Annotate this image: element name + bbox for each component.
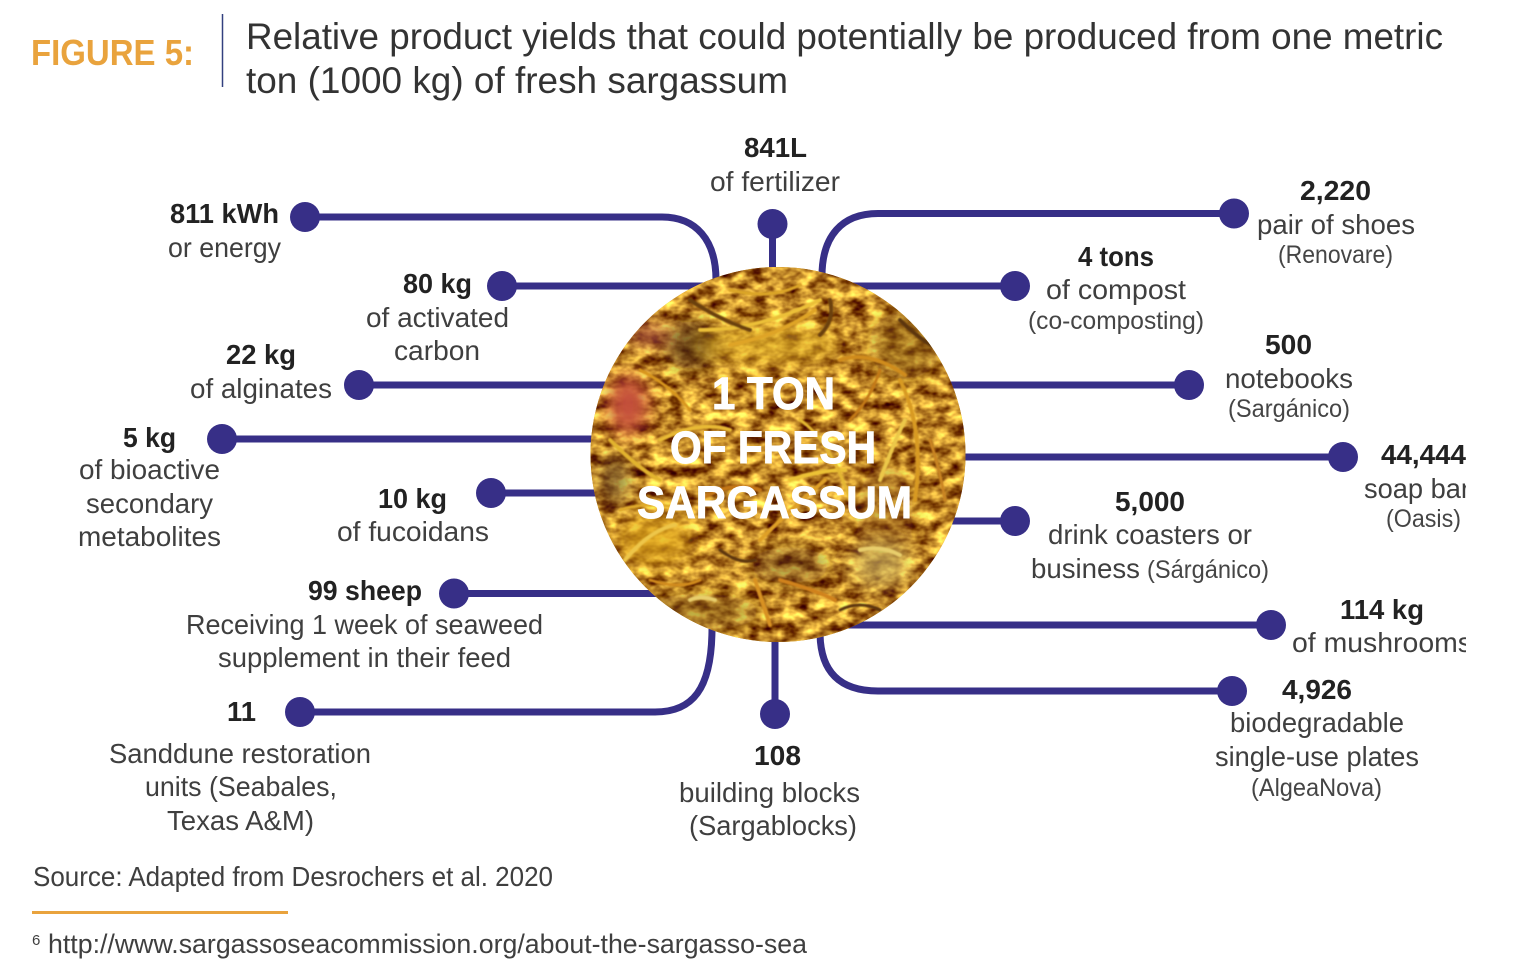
callout: 5,000 drink coasters or business: (Sárgánico) bbox=[1147, 556, 1269, 584]
value: 114 kg bbox=[1340, 594, 1424, 625]
value: 10 kg bbox=[378, 483, 447, 514]
connector bbox=[359, 382, 615, 388]
connector bbox=[845, 282, 1015, 290]
source note: Source: Adapted from Desrochers et al. 2020 bbox=[33, 861, 553, 892]
connector bbox=[222, 436, 600, 442]
connector bbox=[769, 224, 776, 272]
marker bbox=[760, 699, 790, 729]
marker bbox=[1174, 370, 1204, 400]
marker bbox=[290, 202, 320, 232]
value: 99 sheep bbox=[308, 575, 422, 606]
value: 11 bbox=[227, 696, 256, 727]
connector bbox=[772, 636, 778, 714]
connector bbox=[300, 628, 712, 712]
callout: 2,220 pair of shoes: (Renovare) bbox=[1278, 241, 1393, 269]
centre label bbox=[637, 368, 912, 528]
callout: 108 building blocks: (Sargablocks) bbox=[689, 810, 857, 841]
connector bbox=[945, 518, 1015, 524]
marker bbox=[1217, 676, 1247, 706]
description: of mushrooms bbox=[1292, 627, 1472, 658]
marker bbox=[476, 478, 506, 508]
connector bbox=[305, 217, 716, 280]
callout: 108 building blocks bbox=[679, 636, 860, 841]
value: 2,220 bbox=[1300, 175, 1371, 206]
callout: 5 kg of bioactive secondary metabolites: metabolites bbox=[78, 521, 221, 552]
callout: 4,926 biodegradable plates: single-use plates bbox=[1215, 741, 1419, 772]
callout: 841L of fertilizer bbox=[710, 132, 840, 272]
footnote: http://www.sargassoseacommission.org/about-the-sargasso-sea bbox=[48, 929, 808, 959]
description: notebooks bbox=[1225, 363, 1353, 394]
description: pair of shoes bbox=[1257, 209, 1415, 240]
callout: 22 kg of alginates bbox=[190, 339, 615, 404]
figure label: FIGURE 5: bbox=[31, 32, 194, 73]
callout: 5 kg of bioactive secondary metabolites: secondary bbox=[86, 488, 213, 519]
marker bbox=[1000, 271, 1030, 301]
description: biodegradable bbox=[1230, 707, 1404, 738]
centre circle: sargassum photo with label bbox=[590, 267, 966, 643]
callout: 5,000 drink coasters or business bbox=[945, 486, 1269, 584]
description: Receiving 1 week of seaweed bbox=[186, 609, 543, 640]
value: 80 kg bbox=[403, 268, 472, 299]
title: Relative product yields that could potentially be produced from one metric bbox=[246, 16, 1443, 57]
connector bbox=[454, 590, 660, 597]
title bbox=[246, 16, 1443, 101]
callout: 114 kg of mushrooms bbox=[848, 599, 1466, 652]
sargassum texture bbox=[590, 267, 966, 643]
connector bbox=[502, 282, 705, 290]
centre label: OF FRESH bbox=[670, 422, 876, 473]
callout: 99 sheep bbox=[186, 575, 660, 673]
callout: 80 kg of activated carbon bbox=[366, 268, 705, 366]
marker bbox=[344, 370, 374, 400]
callout: 5 kg of bioactive secondary metabolites bbox=[78, 422, 600, 552]
connector bbox=[820, 632, 1232, 691]
value: 4 tons bbox=[1078, 241, 1154, 272]
callout: 2,220 pair of shoes bbox=[822, 175, 1415, 276]
marker bbox=[1328, 442, 1358, 472]
description: drink coasters or bbox=[1048, 519, 1252, 550]
callout: 811 kWh of energy bbox=[168, 198, 716, 280]
callout: 80 kg of activated carbon: carbon bbox=[394, 335, 480, 366]
marker bbox=[439, 578, 469, 608]
marker bbox=[1219, 198, 1249, 228]
title: ton (1000 kg) of fresh sargassum bbox=[246, 60, 788, 101]
callout: 4,926 biodegradable plates: (AlgeaNova) bbox=[1251, 774, 1382, 802]
value: 22 kg bbox=[226, 339, 296, 370]
callout: 4,926 biodegradable plates bbox=[820, 632, 1419, 802]
marker bbox=[758, 209, 788, 239]
description: of alginates bbox=[190, 373, 332, 404]
description: of activated bbox=[366, 302, 509, 333]
callout: 44,444 soap bar: (Oasis) bbox=[1386, 505, 1461, 533]
marker bbox=[1000, 506, 1030, 536]
value: 108 bbox=[754, 740, 801, 771]
callout: 11 sanddune restoration units: Texas A&M) bbox=[167, 805, 314, 836]
centre label: 1 TON bbox=[712, 368, 835, 419]
description: soap bar bbox=[1364, 473, 1470, 504]
callout: 5,000 drink coasters or business: business bbox=[1031, 553, 1140, 584]
connector bbox=[822, 214, 1234, 276]
connector bbox=[945, 382, 1189, 388]
callout: 4 tons of compost: (co-composting) bbox=[1028, 307, 1204, 335]
value: 500 bbox=[1265, 329, 1312, 360]
description: of bioactive bbox=[79, 454, 220, 485]
value: 841L bbox=[744, 132, 807, 163]
value: 44,444 bbox=[1381, 439, 1466, 470]
callout: 11 sanddune restoration units: units (Seabales, bbox=[145, 771, 337, 802]
callout: 500 notebooks bbox=[945, 329, 1353, 423]
value: 4,926 bbox=[1282, 674, 1352, 705]
callout: 500 notebooks: (Sargánico) bbox=[1228, 395, 1350, 423]
description: of fucoidans bbox=[337, 516, 489, 547]
callout: 11 sanddune restoration units bbox=[109, 628, 712, 836]
callout: 4 tons of compost bbox=[845, 241, 1204, 335]
marker bbox=[487, 271, 517, 301]
footnote: 6 bbox=[32, 932, 40, 949]
description: of compost bbox=[1046, 274, 1186, 305]
description: of fertilizer bbox=[710, 166, 840, 197]
connector bbox=[840, 622, 1271, 628]
description: or energy bbox=[168, 232, 281, 263]
centre label: SARGASSUM bbox=[637, 477, 912, 528]
connector bbox=[960, 454, 1343, 460]
value: 5 kg bbox=[123, 422, 176, 453]
description: Sanddune restoration bbox=[109, 738, 371, 769]
marker bbox=[207, 424, 237, 454]
marker bbox=[1256, 610, 1286, 640]
description: building blocks bbox=[679, 777, 860, 808]
value: 811 kWh bbox=[170, 198, 279, 229]
callout: 99 sheep: supplement in their feed bbox=[218, 642, 511, 673]
marker bbox=[285, 697, 315, 727]
value: 5,000 bbox=[1115, 486, 1185, 517]
callout: 44,444 soap bar bbox=[960, 439, 1470, 533]
connector bbox=[491, 490, 600, 496]
callout: 10 kg of fucoidans bbox=[337, 478, 600, 547]
